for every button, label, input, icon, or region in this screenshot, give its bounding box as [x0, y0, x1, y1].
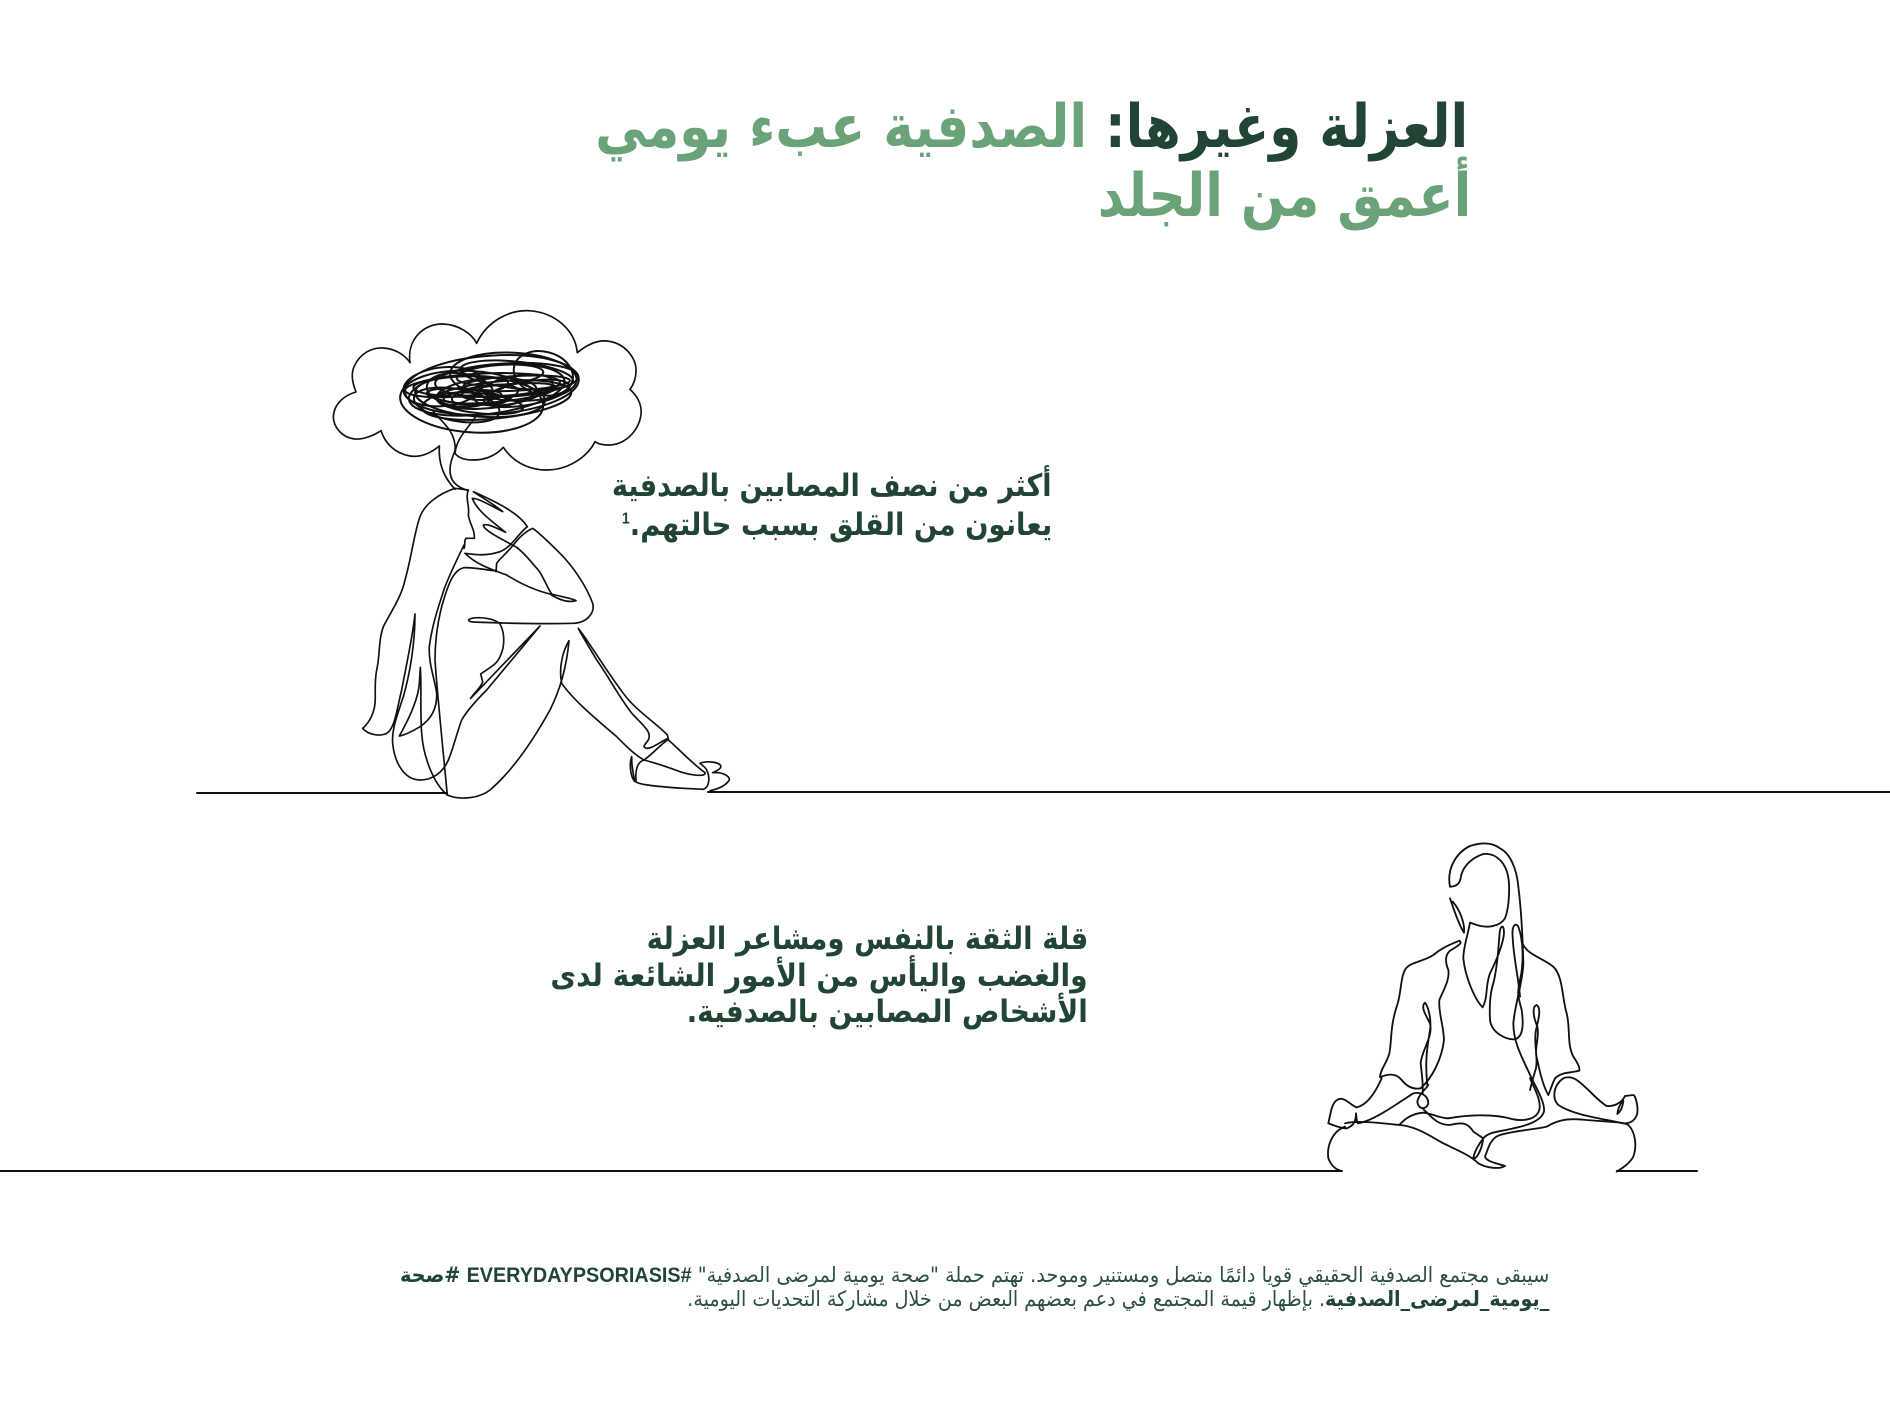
icon: seated woman hugging her knees	[363, 488, 729, 798]
hip and leg	[399, 545, 668, 798]
footer text: سيبقى مجتمع الصدفية الحقيقي قويا دائمًا متصل ومستنير وموحد. تهتم حملة "صحة يومية لمرضى الصدفية" #EVERYDAYPSORIASIS #صحة	[400, 1263, 1549, 1287]
text block: confidence statement	[551, 921, 1088, 1030]
arm under knee	[469, 528, 593, 698]
title: أعمق من الجلد	[1098, 161, 1471, 231]
left knee	[1328, 1127, 1345, 1171]
title	[595, 92, 1471, 231]
ground line lower	[0, 1170, 1697, 1172]
left shoulder and sleeve	[1380, 941, 1461, 1089]
tails to neck	[433, 412, 477, 491]
left hair lock	[1450, 898, 1464, 933]
title: العزلة وغيرها: الصدفية عبء يومي	[595, 92, 1468, 162]
foot	[636, 740, 729, 791]
waist line	[1399, 1078, 1540, 1125]
shin	[578, 628, 668, 748]
right shoulder and sleeve	[1523, 945, 1579, 1095]
inner fold	[1423, 1109, 1483, 1138]
text block: confidence statement: قلة الثقة بالنفس ومشاعر العزلة	[646, 921, 1088, 957]
text block: anxiety statement: أكثر من نصف المصابين بالصدفية	[612, 468, 1052, 504]
left arm and hand	[1328, 1078, 1428, 1128]
torso	[435, 568, 497, 795]
ground line upper	[197, 792, 1890, 793]
heel	[630, 757, 635, 782]
thumb	[1617, 1101, 1623, 1114]
text block: anxiety statement	[612, 465, 1052, 543]
footer text: _يومية_لمرضى_الصدفية. بإظهار قيمة المجتمع في دعم بعضهم البعض من خلال مشاركة التحديات اليومية.	[687, 1287, 1549, 1311]
hair and back	[363, 488, 540, 780]
right arm and hand	[1554, 1077, 1638, 1123]
cloud outline	[333, 311, 641, 470]
icon: thought cloud with tangled scribble	[333, 311, 641, 491]
hand and sleeve	[465, 492, 576, 601]
face	[455, 488, 474, 548]
crossed legs	[1345, 1119, 1635, 1172]
text block: anxiety statement: يعانون من القلق بسبب حالتهم.1	[622, 507, 1052, 543]
icon: woman meditating cross-legged	[1328, 844, 1638, 1172]
text block: confidence statement: الأشخاص المصابين بالصدفية.	[687, 994, 1088, 1030]
head and long hair	[1449, 844, 1544, 1159]
face and neckline	[1450, 854, 1523, 1039]
scribble	[398, 345, 581, 437]
text block: confidence statement: والغضب واليأس من الأمور الشائعة لدى	[551, 958, 1088, 994]
left sleeve fold	[1421, 1003, 1431, 1093]
